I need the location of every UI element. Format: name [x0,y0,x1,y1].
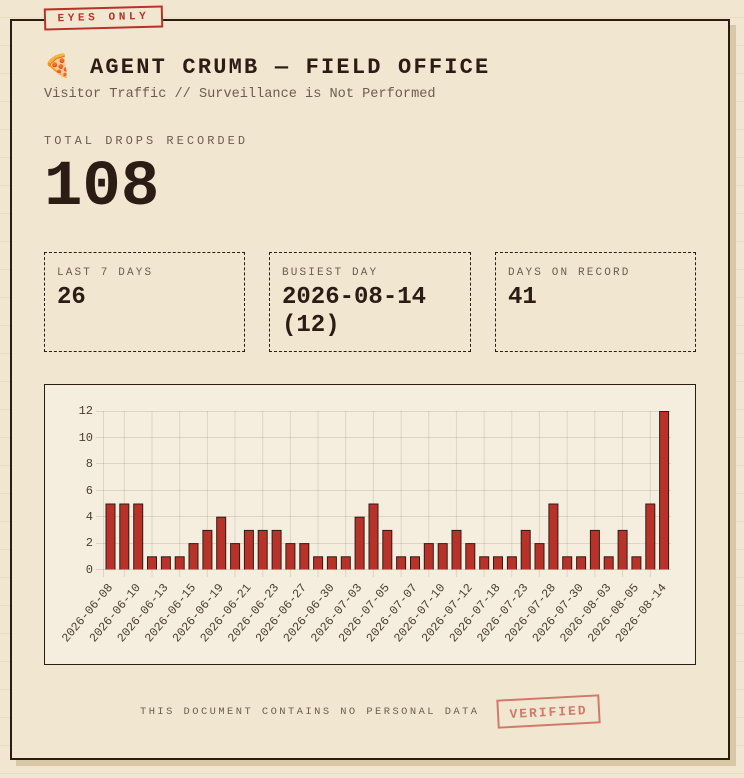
footer note: THIS DOCUMENT CONTAINS NO PERSONAL DATA [140,706,480,718]
stat card: last 7 days [44,252,245,352]
stamp: eyes only [44,5,163,31]
x axis labels: 2026-07-05 [336,581,393,645]
y axis labels: 8 [86,457,93,471]
y axis labels: 12 [79,404,93,418]
total value: 108 [44,152,159,224]
x axis labels: 2026-06-27 [253,581,310,645]
x axis labels: 2026-06-10 [87,581,144,645]
x axis labels: 2026-07-28 [502,581,559,645]
x axis labels: 2026-07-10 [391,581,448,645]
x axis labels: 2026-06-30 [281,581,338,645]
x axis labels [59,581,670,645]
y axis labels [79,404,93,577]
stat card: busiest day: (12) [282,312,340,339]
title: 🍕 AGENT CRUMB — FIELD OFFICE [44,55,490,80]
y axis labels: 0 [86,563,93,577]
y axis labels: 6 [86,484,93,498]
x axis labels: 2026-06-15 [142,581,199,645]
x axis labels: 2026-06-23 [225,581,282,645]
x axis labels: 2026-07-12 [419,581,476,645]
x axis labels: 2026-06-13 [114,581,171,645]
stamp: verified: VERIFIED [509,703,588,722]
x axis labels: 2026-08-14 [613,581,670,645]
stat card: busiest day: 2026-08-14 [282,284,426,311]
bar chart [44,384,696,665]
y axis labels: 4 [86,510,93,524]
stamp: eyes only: EYES ONLY [57,11,150,25]
total label: TOTAL DROPS RECORDED [44,134,248,148]
x axis labels: 2026-07-03 [308,581,365,645]
x axis labels: 2026-07-30 [530,581,587,645]
stat card: last 7 days: 26 [57,284,86,311]
stat card: last 7 days: LAST 7 DAYS [57,267,153,279]
y axis labels: 2 [86,536,93,550]
x axis labels: 2026-07-23 [474,581,531,645]
x axis labels: 2026-07-18 [447,581,504,645]
x axis labels: 2026-06-19 [170,581,227,645]
bars [106,412,669,570]
x axis labels: 2026-08-05 [585,581,642,645]
x axis labels: 2026-07-07 [364,581,421,645]
x axis labels: 2026-06-21 [197,581,254,645]
stat card: busiest day [269,252,471,352]
x axis labels: 2026-08-03 [557,581,614,645]
y axis labels: 10 [79,431,93,445]
subtitle: Visitor Traffic // Surveillance is Not Performed [44,87,436,102]
stat card: days on record: DAYS ON RECORD [508,267,631,279]
stat card: busiest day: BUSIEST DAY [282,267,378,279]
x axis labels: 2026-06-08 [59,581,116,645]
stat card: days on record: 41 [508,284,537,311]
stat card: days on record [495,252,696,352]
stamp: verified [496,694,601,729]
